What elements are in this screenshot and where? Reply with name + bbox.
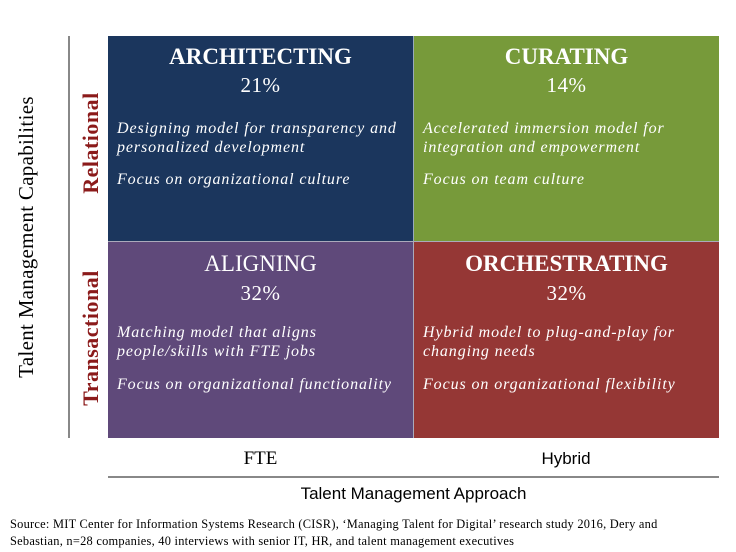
quadrant: curating: integration and empowerment	[423, 139, 640, 156]
quadrant: orchestrating: 32%	[546, 281, 586, 305]
row label: Relational: Relational	[78, 92, 103, 194]
y-axis title: Talent Management Capabilities	[14, 96, 38, 378]
source note	[10, 517, 658, 548]
x-axis title: Talent Management Approach	[301, 484, 526, 503]
quadrant: aligning: 32%	[240, 281, 280, 305]
source note: Source: MIT Center for Information Systems Research (CISR), ‘Managing Talent for Digital’ research study 2016, Dery and	[10, 517, 658, 531]
quadrant: curating: Accelerated immersion model for	[423, 120, 665, 137]
quadrant: curating: 14%	[546, 73, 586, 97]
quadrant: aligning: Focus on organizational functionality	[117, 376, 392, 393]
row label: Transactional: Transactional	[78, 270, 103, 406]
quadrant: architecting: personalized development	[117, 139, 305, 156]
quadrant: orchestrating: ORCHESTRATING	[465, 251, 668, 276]
quadrant: aligning: Matching model that aligns	[117, 324, 317, 341]
quadrant: architecting	[108, 36, 413, 241]
quadrant: orchestrating: Hybrid model to plug-and-play for	[423, 324, 675, 341]
quadrant: orchestrating	[413, 241, 719, 438]
quadrant: architecting: 21%	[240, 73, 280, 97]
column label: FTE: FTE	[244, 448, 277, 469]
quadrant: architecting: Designing model for transparency and	[117, 120, 397, 137]
column label: Hybrid: Hybrid	[541, 449, 591, 468]
quadrant: architecting: Focus on organizational culture	[117, 171, 350, 188]
source note: Sebastian, n=28 companies, 40 interviews with senior IT, HR, and talent management executives	[10, 534, 514, 548]
quadrant: aligning: people/skills with FTE jobs	[117, 343, 316, 360]
quadrant: curating: CURATING	[505, 44, 628, 69]
quadrant: orchestrating: changing needs	[423, 343, 536, 360]
y-axis line	[68, 36, 70, 438]
quadrant: curating	[413, 36, 719, 241]
quadrant: aligning: ALIGNING	[204, 251, 317, 276]
quadrant: curating: Focus on team culture	[423, 171, 585, 188]
x-axis line	[108, 476, 719, 478]
quadrant: aligning	[108, 241, 413, 438]
quadrant: architecting: ARCHITECTING	[169, 44, 352, 69]
quadrant: orchestrating: Focus on organizational flexibility	[423, 376, 676, 393]
